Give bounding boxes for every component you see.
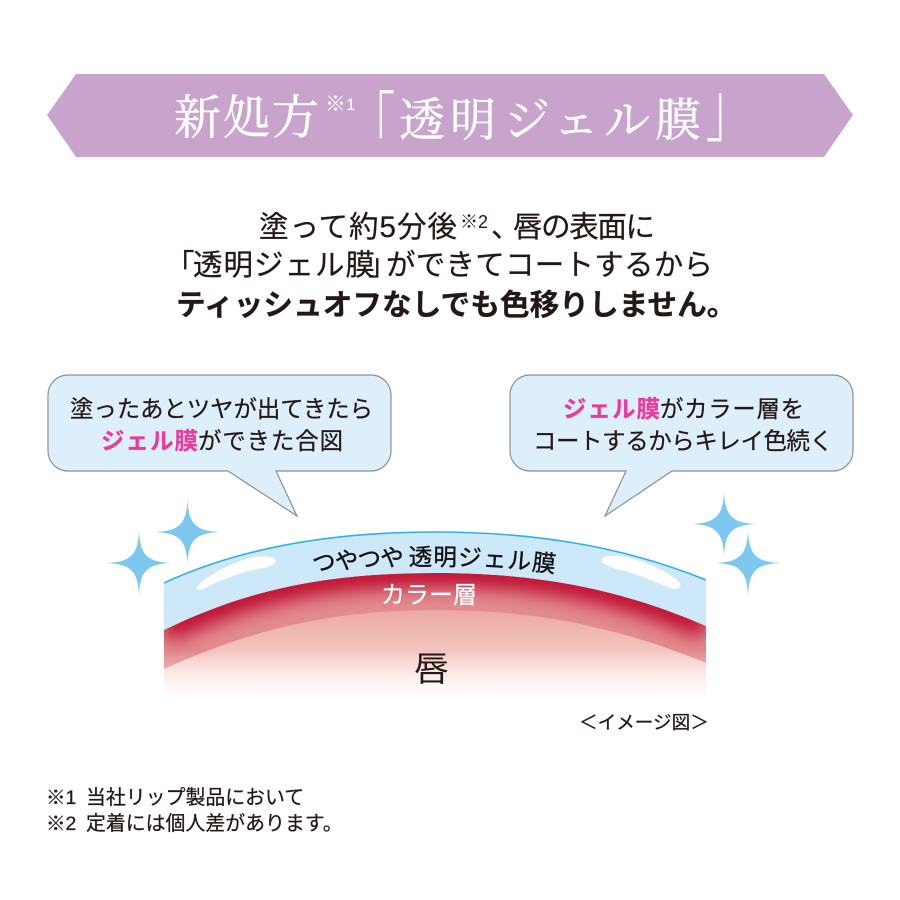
lead text: 「 xyxy=(165,249,195,282)
speech bubble: right: ジェル膜 xyxy=(563,396,660,422)
lead text: 塗って約5分後 xyxy=(259,211,457,244)
speech bubble: left: ジェル膜 xyxy=(101,428,198,454)
colour layer xyxy=(164,573,706,669)
lead text: 」 xyxy=(368,249,398,282)
speech bubble: left: 塗ったあとツヤが出てきたら xyxy=(70,396,373,422)
footnotes: ※2 xyxy=(46,813,76,835)
gloss highlight right xyxy=(602,556,680,589)
label: colour layer: カラー層 xyxy=(381,582,477,609)
lead text: 透明ジェル膜 xyxy=(193,249,375,282)
title banner: 透明ジェル膜 xyxy=(399,95,701,146)
lead text xyxy=(165,211,736,322)
label: lip: 唇 xyxy=(414,641,449,692)
lip cross-section diagram xyxy=(164,532,706,697)
title banner: 1 xyxy=(346,95,355,114)
footnotes: ※1 xyxy=(46,787,76,809)
lead text: ※2 xyxy=(460,212,488,232)
title text: 新処方 xyxy=(174,93,319,145)
lead text: ができてコートするから xyxy=(386,249,713,282)
lead text: 唇の表面に xyxy=(513,211,655,244)
image note: ＜イメージ図＞ xyxy=(579,712,709,733)
footnotes: 定着には個人差があります。 xyxy=(86,812,343,835)
label: gel layer: つやつや 透明ジェル膜 xyxy=(313,546,556,574)
footnotes: 当社リップ製品において xyxy=(86,786,304,809)
footnotes xyxy=(46,786,343,835)
title banner xyxy=(47,71,853,168)
clear gel layer xyxy=(164,532,706,630)
title banner: 」 xyxy=(706,71,750,151)
speech bubble: right xyxy=(510,375,853,516)
speech bubble: left: ができた合図 xyxy=(198,428,343,454)
sparkle icons xyxy=(106,491,781,596)
lip layer xyxy=(164,590,706,697)
lead text: 、 xyxy=(491,211,521,244)
speech bubble: right: がカラー層を xyxy=(660,396,804,422)
title banner: 「 xyxy=(351,88,395,168)
speech bubble: left xyxy=(48,375,391,516)
lead text: ティッシュオフなしでも色移りしません。 xyxy=(176,289,736,322)
title banner: ※ xyxy=(325,93,346,116)
speech bubble: right: コートするからキレイ色続く xyxy=(533,428,833,454)
gloss highlight left xyxy=(197,556,276,590)
